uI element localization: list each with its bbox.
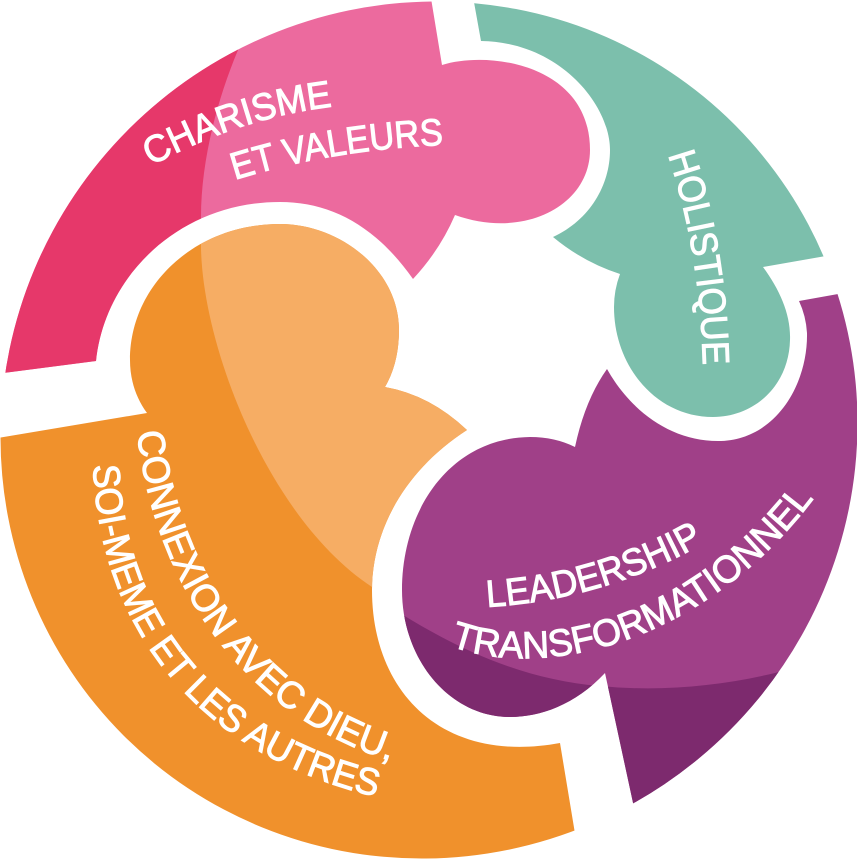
purple segment base	[402, 294, 857, 804]
orange segment light area	[201, 224, 467, 587]
purple segment dark area	[404, 616, 778, 804]
label: transformationnel: TRANSFORMATIONNEL	[456, 492, 814, 659]
label: charisme: CHARISME	[144, 80, 332, 162]
label: holistique: HOLISTIQUE	[668, 149, 730, 364]
label: et valeurs: ET VALEURS	[230, 118, 442, 180]
panel: charisme et valeurs	[5, 2, 590, 373]
panel: connexion	[0, 224, 574, 858]
teal segment	[474, 3, 824, 417]
orange segment base	[0, 224, 586, 861]
label: leadership: LEADERSHIP	[487, 523, 696, 608]
label: soi-meme et les autres: SOI-MEME ET LES AUTRES	[92, 466, 380, 796]
label: connexion avec dieu: CONNEXION AVEC DIEU,	[138, 431, 390, 764]
panel: holistique	[474, 3, 824, 417]
panel: leadership transformationnel	[402, 294, 857, 804]
pink segment base	[0, 0, 590, 376]
pink segment dark area	[5, 50, 238, 373]
